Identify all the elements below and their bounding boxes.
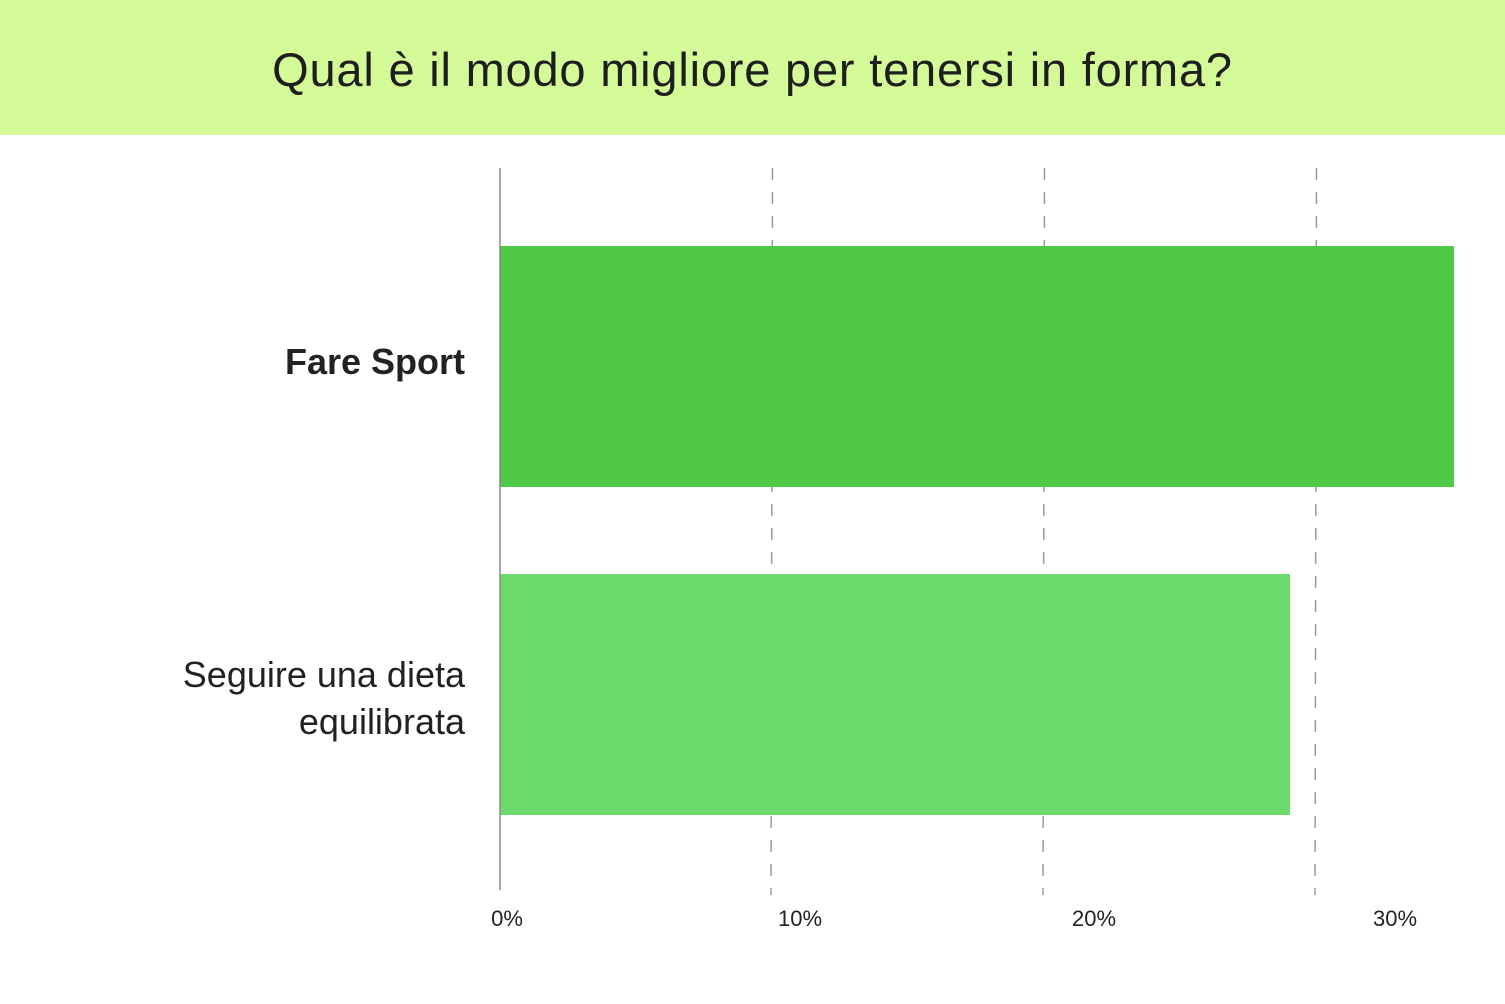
axis tick labels: 0% — [491, 906, 523, 931]
title: Qual è il modo migliore per tenersi in forma? — [272, 43, 1233, 96]
bar: Seguire una dieta equilibrata — [500, 574, 1290, 815]
category label: Seguire una dieta equilibrata: Seguire una dieta — [183, 654, 465, 695]
axis tick labels — [491, 906, 1417, 931]
header band — [0, 0, 1505, 135]
category label: Seguire una dieta equilibrata: equilibrata — [299, 701, 465, 742]
category label: Fare Sport: Fare Sport — [285, 341, 465, 382]
axis tick labels: 30% — [1373, 906, 1417, 931]
axis tick labels: 20% — [1072, 906, 1116, 931]
bar: Fare Sport — [500, 246, 1454, 487]
axis tick labels: 10% — [778, 906, 822, 931]
category label: Seguire una dieta equilibrata — [183, 654, 466, 742]
